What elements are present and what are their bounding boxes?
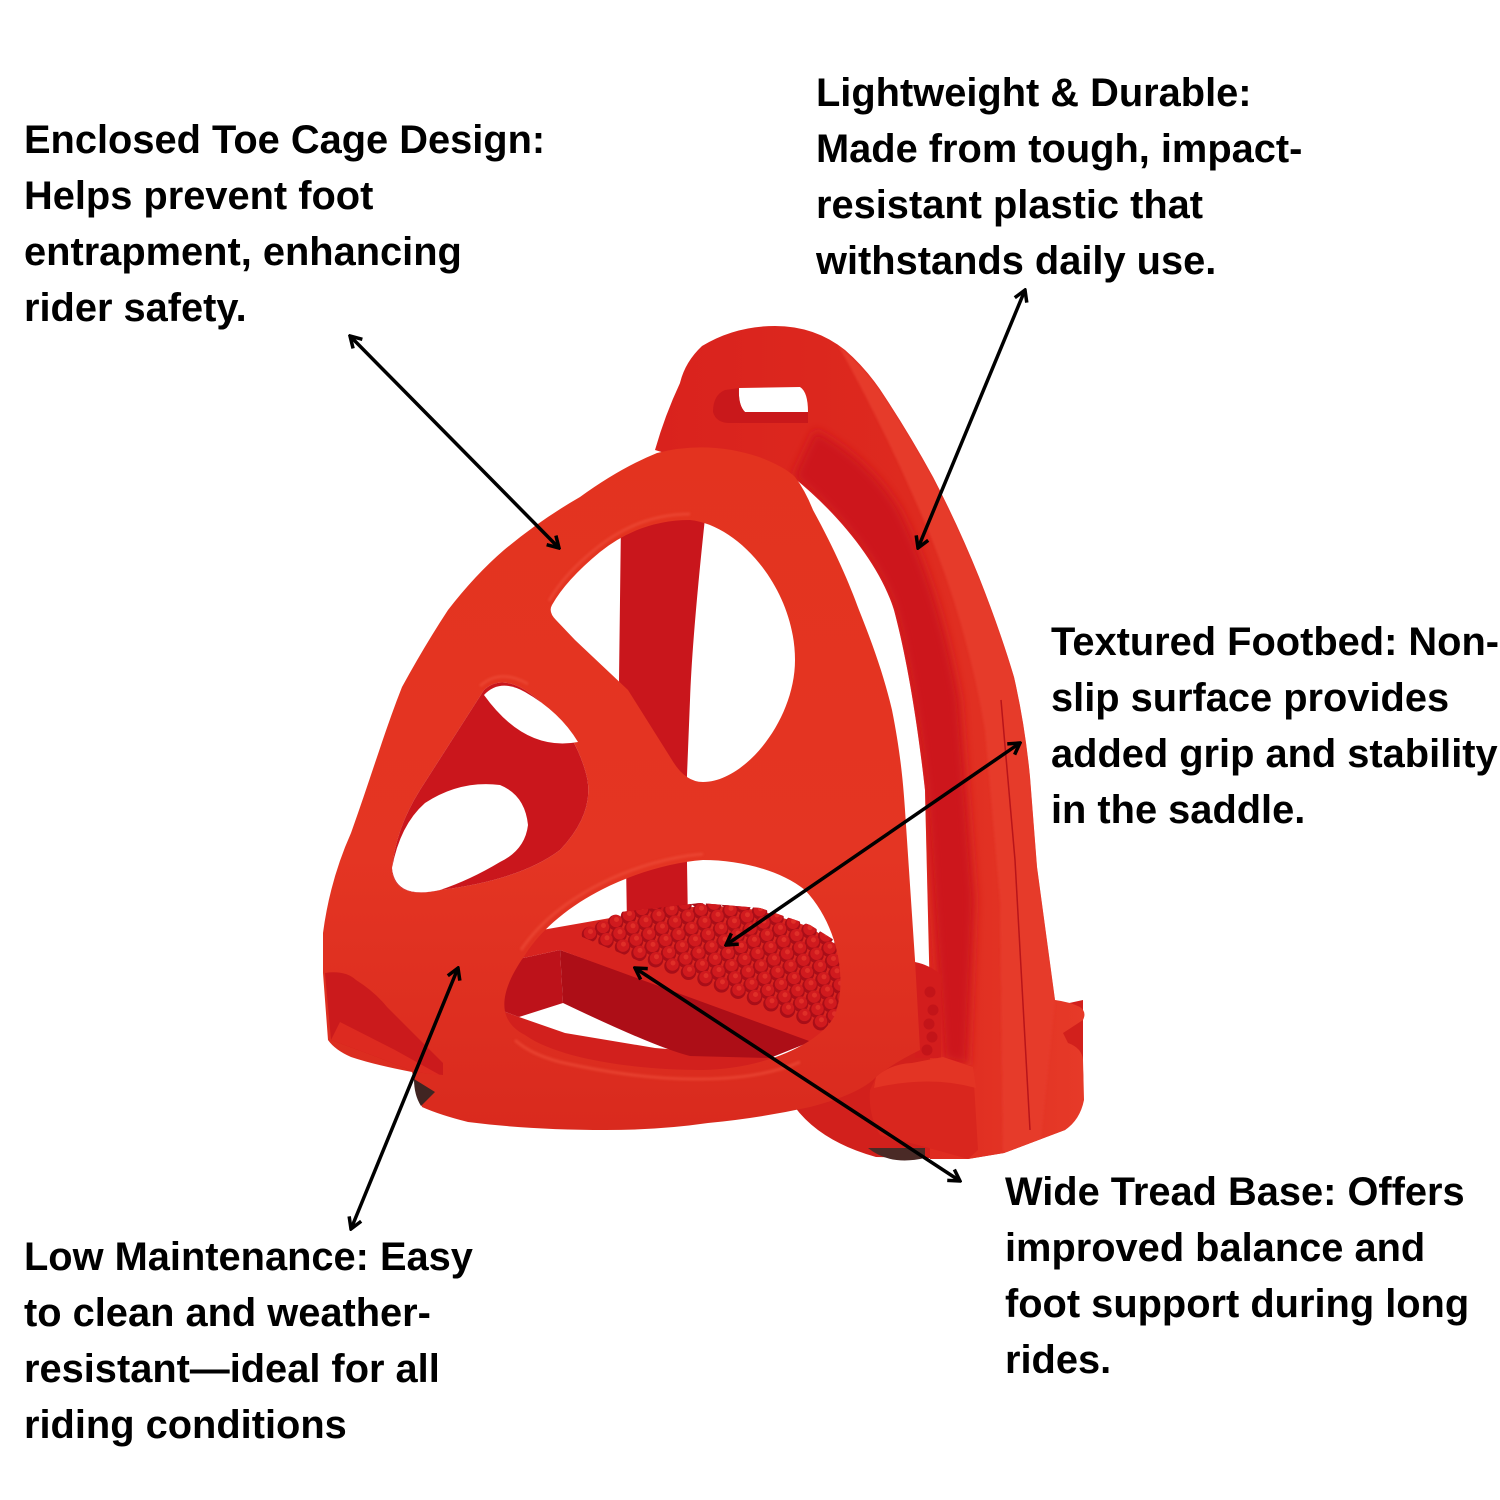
back tread disc — [790, 1000, 1083, 1159]
arrow: textured footbed — [726, 743, 1020, 945]
text: low maintenance: to clean and weather- — [24, 1291, 431, 1335]
arrow: low maintenance — [351, 968, 458, 1229]
text: lightweight and durable: withstands daily use. — [816, 239, 1216, 283]
text: enclosed toe cage design: rider safety. — [24, 286, 247, 330]
seam line — [1001, 700, 1030, 1130]
stirrup product illustration — [323, 326, 1084, 1160]
small cage opening: back surface — [392, 682, 588, 892]
black foot pad — [414, 1079, 435, 1106]
dark inner channel — [793, 430, 975, 1066]
slot inner shadow — [713, 388, 808, 423]
text: lightweight and durable: resistant plastic that — [816, 183, 1203, 227]
text: wide tread base: Wide Tread Base: Offers — [1005, 1170, 1465, 1214]
rubber foot — [868, 1148, 925, 1160]
footbed grip studs — [582, 903, 840, 1030]
text: enclosed toe cage design: entrapment, enhancing — [24, 230, 462, 274]
text: wide tread base: foot support during long — [1005, 1282, 1469, 1326]
outer rim highlight — [793, 345, 1055, 1153]
text: enclosed toe cage design: Enclosed Toe Cage Design: — [24, 118, 545, 162]
text: enclosed toe cage design — [24, 118, 545, 330]
arrow: toe cage — [350, 336, 559, 548]
dark footbed side — [560, 950, 815, 1058]
text: textured footbed: in the saddle. — [1051, 788, 1305, 832]
text: wide tread base: rides. — [1005, 1338, 1111, 1382]
foot block top — [874, 1057, 976, 1088]
opening highlights — [480, 514, 800, 1079]
text: lightweight and durable: Lightweight & Durable: — [816, 71, 1252, 115]
rear studs — [927, 992, 933, 1050]
text: lightweight and durable: Made from tough, impact- — [816, 127, 1302, 171]
text: low maintenance: Low Maintenance: Easy — [24, 1235, 473, 1279]
footbed lower band — [495, 1008, 800, 1085]
text: wide tread base: improved balance and — [1005, 1226, 1425, 1270]
front toe cage — [323, 447, 920, 1130]
arrow: lightweight arch — [918, 290, 1025, 548]
text: textured footbed: slip surface provides — [1051, 676, 1449, 720]
dark left wall of footbed — [495, 950, 563, 1017]
text: wide tread base — [1005, 1170, 1469, 1382]
text: lightweight and durable — [816, 71, 1302, 283]
inner strap — [619, 518, 705, 925]
text: enclosed toe cage design: Helps prevent foot — [24, 174, 373, 218]
left side opening — [325, 972, 443, 1075]
rear footbed sliver — [915, 962, 941, 1058]
upper white gap — [484, 686, 578, 743]
text: low maintenance — [24, 1235, 473, 1447]
lower lit ledge in left opening — [331, 1022, 440, 1075]
text: textured footbed: added grip and stability — [1051, 732, 1498, 776]
text: textured footbed: Textured Footbed: Non- — [1051, 620, 1499, 664]
text: low maintenance: riding conditions — [24, 1403, 347, 1447]
arrow: wide tread base — [635, 968, 960, 1181]
text: textured footbed — [1051, 620, 1499, 832]
foot block — [870, 1057, 978, 1159]
text: low maintenance: resistant—ideal for all — [24, 1347, 440, 1391]
footbed top — [514, 905, 850, 1045]
strap slot opening — [739, 387, 808, 412]
lower white gap — [392, 784, 528, 892]
back arch with strap slot — [655, 326, 1084, 1159]
